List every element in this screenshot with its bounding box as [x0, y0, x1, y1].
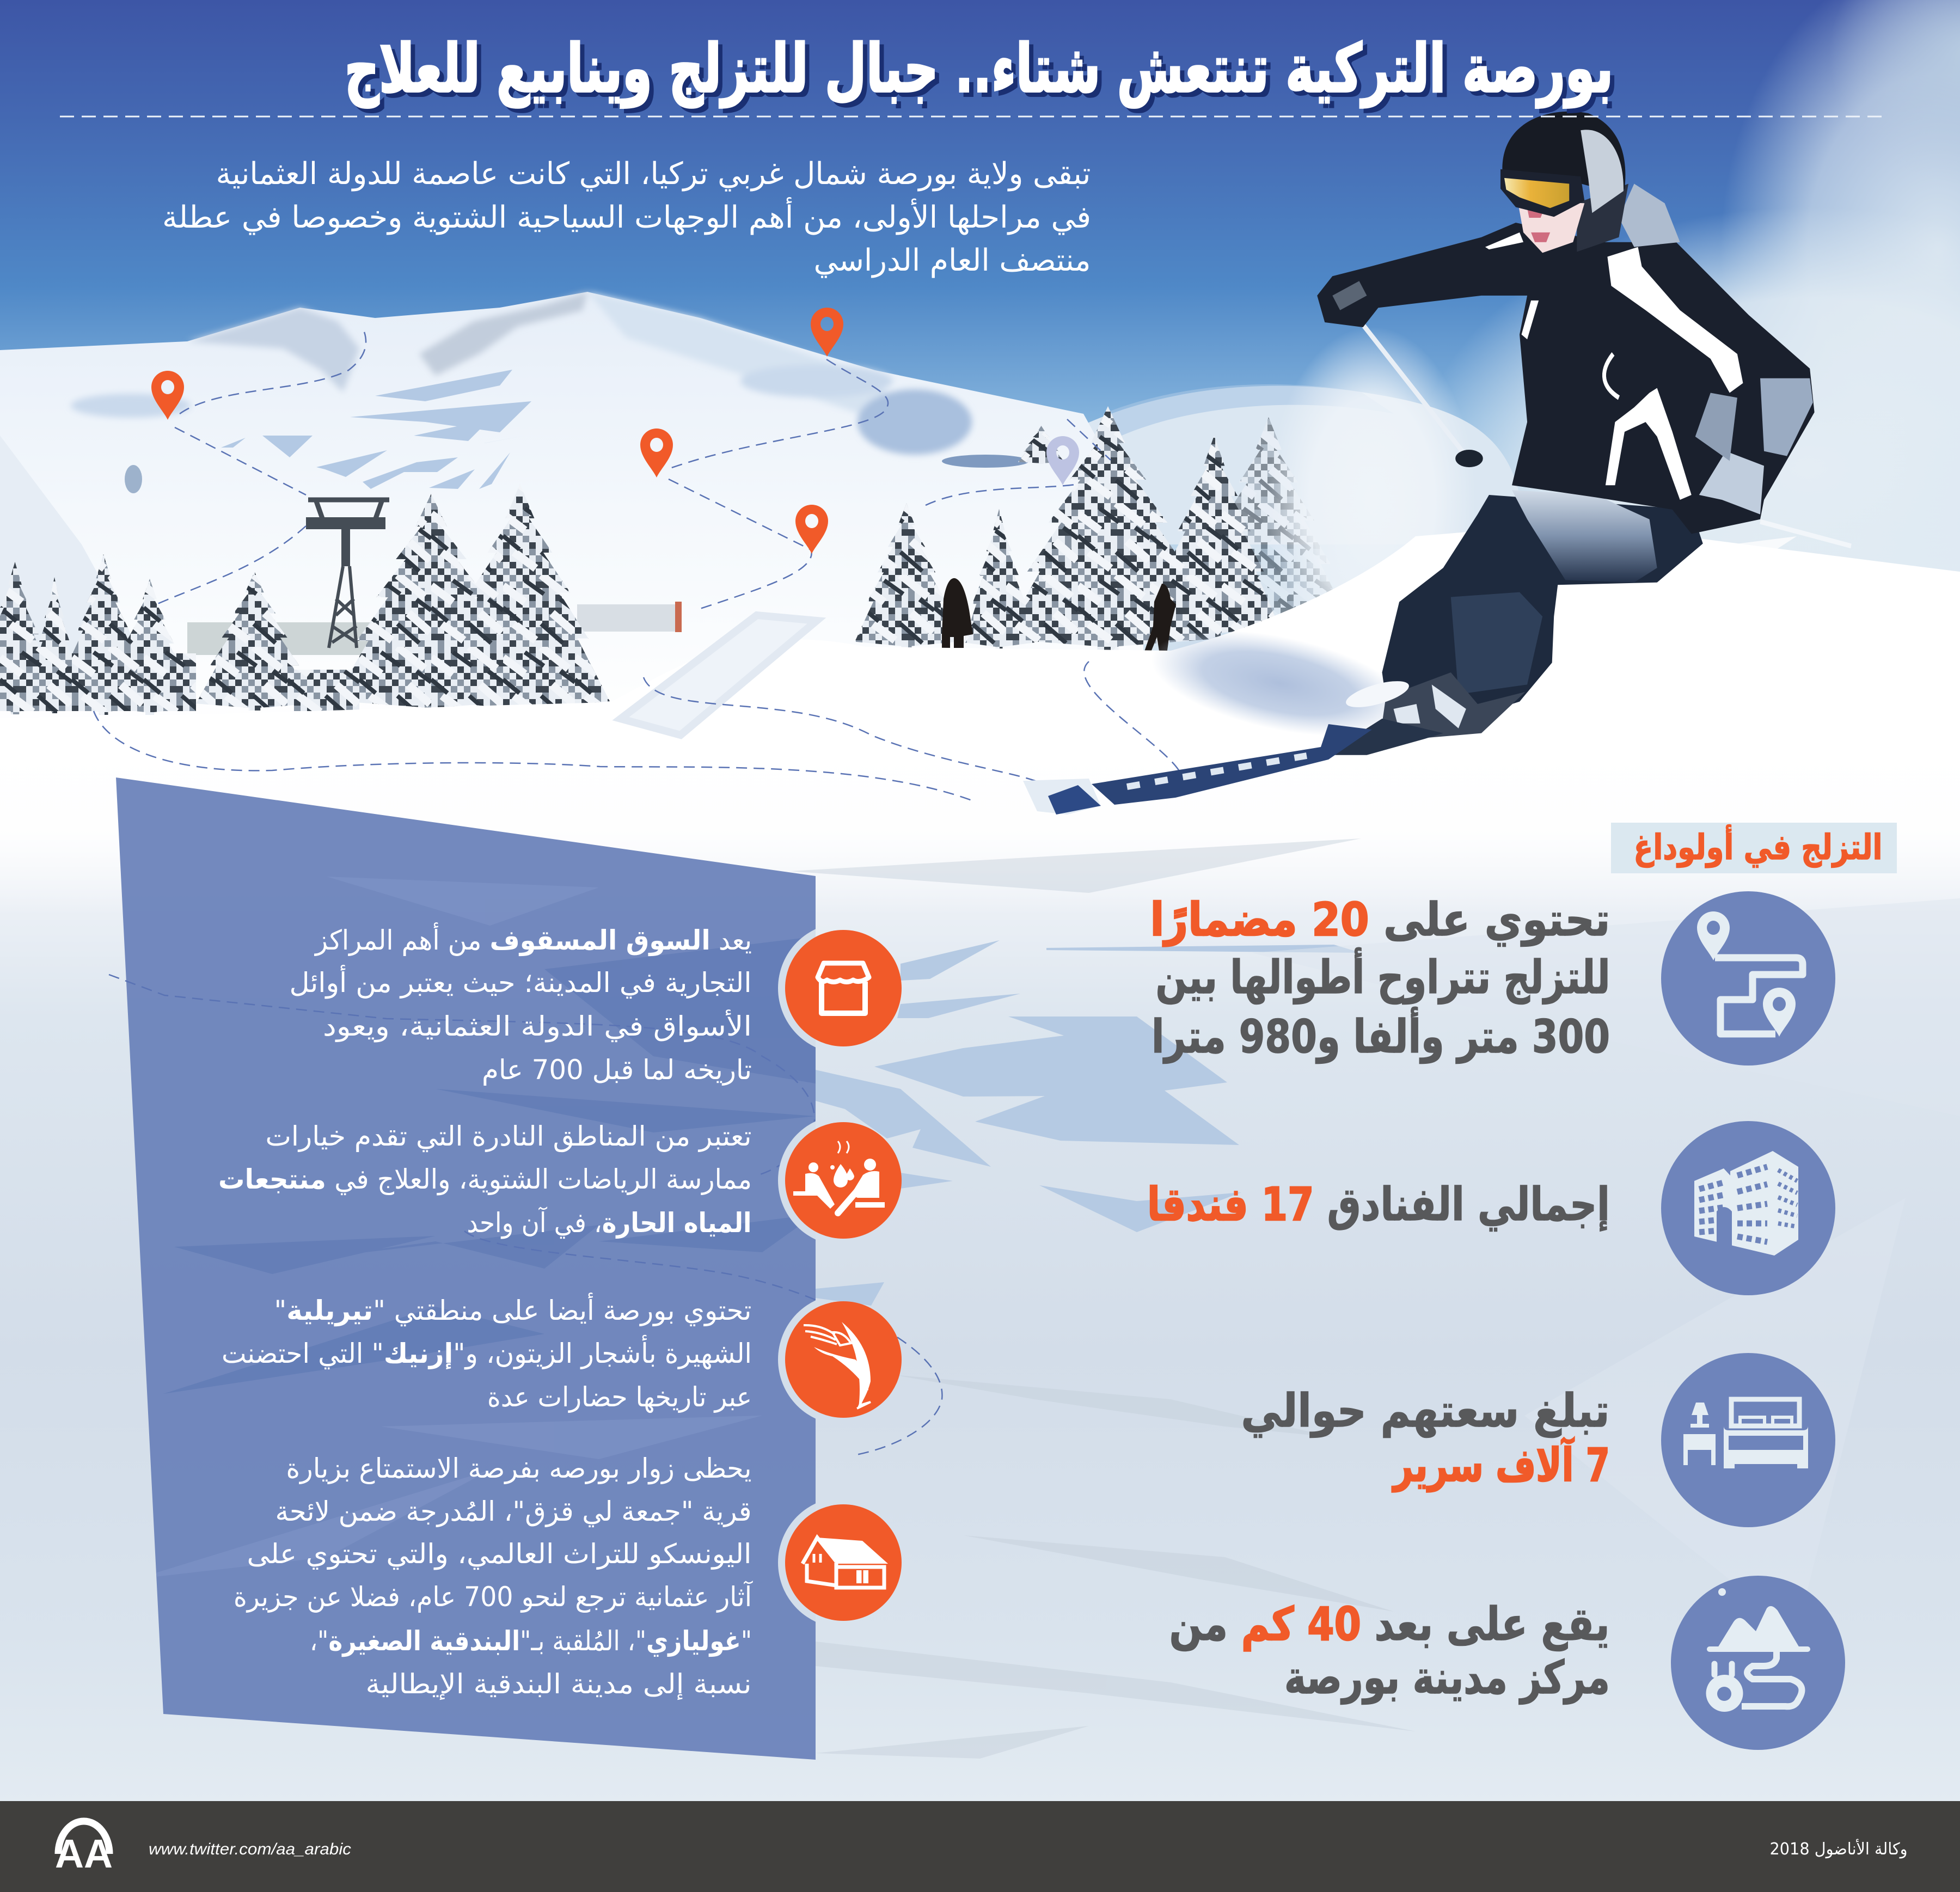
stat: beds: 7 آلاف سرير: [1392, 1437, 1610, 1492]
dashed divider: [60, 115, 1888, 118]
route lines: [94, 327, 1179, 1455]
panel text: covered market: التجارية في المدينة؛ حيث يعتبر من أوائل: [290, 965, 751, 999]
stat: beds: تبلغ سعتهم حوالي: [1241, 1384, 1609, 1438]
intro text: في مراحلها الأولى، من أهم الوجهات السياحية الشتوية وخصوصا في عطلة: [162, 197, 1091, 235]
icon: mountains and road: [1671, 1576, 1845, 1750]
background sky: [0, 0, 1960, 681]
panel text: cumalikizik and golyazi: "غوليازي"، المُلقبة بـ"البندقية الصغيرة"،: [310, 1625, 752, 1657]
circle rings cut into panel: [778, 929, 816, 1621]
stat: distance: يقع على بعد 40 كم من: [1169, 1597, 1609, 1651]
right side fog: [1416, 0, 1960, 730]
icon: route with pins: [1661, 891, 1835, 1066]
glove highlight: [1332, 281, 1367, 310]
stat: runs: للتزلج تتراوح أطوالها بين: [1155, 947, 1610, 1005]
stat: distance: مركز مدينة بورصة: [1284, 1651, 1610, 1705]
intro text: منتصف العام الدراسي: [813, 243, 1091, 278]
snow spray at skis: [1343, 676, 1412, 713]
panel text: cumalikizik and golyazi: قرية "جمعة لي قزق"، المُدرجة ضمن لائحة: [275, 1496, 751, 1527]
pale diagonal planes: [1252, 898, 1960, 1633]
goggles: [1500, 169, 1584, 217]
helmet: [1502, 112, 1625, 191]
panel text: covered market: الأسواق في الدولة العثمانية، ويعود: [323, 1009, 752, 1043]
panel text: cumalikizik and golyazi: نسبة إلى مدينة البندقية الإيطالية: [366, 1668, 751, 1700]
boots: [1382, 672, 1526, 738]
section label: التزلج في أولوداغ: [1633, 824, 1883, 868]
intro text: تبقى ولاية بورصة شمال غربي تركيا، التي كانت عاصمة للدولة العثمانية: [216, 156, 1091, 192]
panel text: covered market: تاريخه لما قبل 700 عام: [482, 1054, 752, 1086]
panel text: covered market: يعد السوق المسقوف من أهم المراكز: [314, 922, 752, 957]
far hill behind forest: [1062, 384, 1524, 544]
white ice shards: [1552, 536, 1949, 762]
stat: runs: 300 متر وألفا و980 مترا: [1152, 1007, 1610, 1064]
sleeve highlight: [1760, 378, 1813, 456]
grey snow streaks: [789, 838, 1416, 1759]
intro text: [162, 156, 1091, 278]
blue snow patches on mountain: [221, 370, 531, 489]
icon: market: [785, 930, 902, 1046]
icon: house: [785, 1504, 902, 1621]
panel text: tirilye and iznik: تحتوي بورصة أيضا على منطقتي "تيريلية": [274, 1293, 751, 1327]
distant lodge: [187, 602, 682, 655]
blue snow shards: [816, 940, 1361, 1306]
skier: [1317, 112, 1851, 755]
central forest: [849, 403, 1285, 653]
far forest: [1235, 417, 1333, 616]
stat: beds: [1241, 1384, 1610, 1492]
icon: flower and olive leaves: [785, 1301, 902, 1418]
face: [1518, 201, 1584, 253]
ski: [1023, 724, 1372, 815]
panel shards: [156, 938, 816, 1577]
icon: hotel buildings: [1661, 1121, 1835, 1295]
panel text: tirilye and iznik: عبر تاريخها حضارات عدة: [487, 1381, 752, 1413]
fog over forest: [1269, 327, 1475, 675]
left forest: [0, 479, 615, 719]
panel text: hot springs: تعتبر من المناطق النادرة التي تقدم خيارات: [266, 1120, 751, 1152]
footer credit: وكالة الأناضول 2018: [1769, 1838, 1908, 1859]
stat: distance: [1169, 1597, 1610, 1705]
panel text: tirilye and iznik: [222, 1293, 752, 1413]
foreground snow slope: [0, 523, 1960, 926]
panel: attractions: [116, 777, 816, 1760]
stat: runs: [1150, 893, 1610, 1064]
panel text: cumalikizik and golyazi: [234, 1453, 753, 1700]
panel text: tirilye and iznik: الشهيرة بأشجار الزيتون، و"إزنيك" التي احتضنت: [222, 1334, 752, 1370]
jacket white stripes: [1485, 232, 1743, 500]
icon: hot springs: [785, 1122, 902, 1239]
neck: [1577, 184, 1628, 252]
footer bar: [0, 1801, 1960, 1892]
footer twitter link: www.twitter.com/aa_arabic: [149, 1840, 351, 1858]
panel text: hot springs: [218, 1120, 752, 1239]
poles: [1363, 324, 1851, 546]
people on slope: [942, 578, 1176, 654]
panel text: cumalikizik and golyazi: آثار عثمانية ترجع لنحو 700 عام، فضلا عن جزيرة: [234, 1581, 753, 1613]
stat: hotels: إجمالي الفنادق 17 فندقا: [1147, 1178, 1610, 1232]
section label: [1611, 823, 1897, 873]
panel text: hot springs: ممارسة الرياضات الشتوية، والعلاج في منتجعات: [218, 1164, 752, 1196]
background snow: [0, 681, 1960, 1802]
panel text: cumalikizik and golyazi: اليونسكو للتراث العالمي، والتي تحتوي على: [247, 1538, 751, 1570]
panel text: covered market: [290, 922, 752, 1086]
cable car tower: [306, 500, 389, 648]
legs: [1382, 495, 1703, 719]
logo: AA: AA: [55, 1831, 113, 1876]
stat: runs: تحتوي على 20 مضمارًا: [1150, 893, 1610, 947]
panel text: hot springs: المياه الحارة، في آن واحد: [467, 1207, 751, 1239]
pins: [151, 308, 1079, 554]
panel text: cumalikizik and golyazi: يحظى زوار بورصه بفرصة الاستمتاع بزيارة: [286, 1453, 751, 1485]
ski binding: [1325, 719, 1443, 755]
jacket: [1317, 223, 1815, 534]
mountain: [0, 292, 1143, 735]
icon: bed and lamp: [1661, 1353, 1835, 1527]
thigh highlight: [1512, 490, 1657, 583]
